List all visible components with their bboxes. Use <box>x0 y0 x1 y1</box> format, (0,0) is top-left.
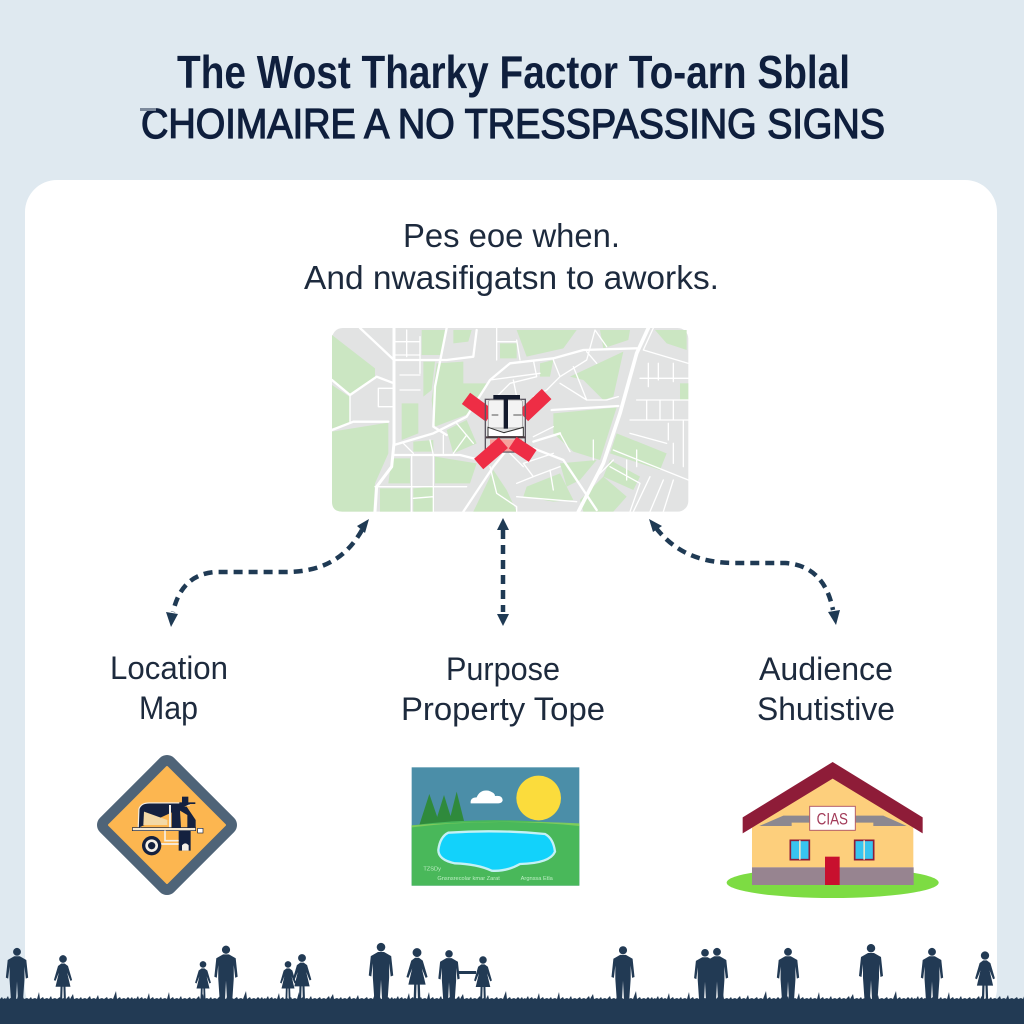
icon: landscape with pond: TZSDy <box>423 867 441 873</box>
icon: warning diamond with vehicle <box>107 765 227 885</box>
intro text <box>304 217 719 296</box>
ground with grass <box>0 986 1024 1024</box>
arrow: map to location <box>166 519 369 627</box>
arrow: map to purpose <box>497 518 509 626</box>
title <box>140 46 885 147</box>
label: location map: Location <box>110 650 228 686</box>
map with crossed-out sign <box>332 328 688 512</box>
label: purpose property type: Property Tope <box>401 691 605 727</box>
arrow: map to audience <box>649 519 840 625</box>
silhouettes: row of people <box>6 943 995 1000</box>
intro text: And nwasifigatsn to aworks. <box>304 259 719 296</box>
icon: sign post <box>485 395 525 452</box>
icon: house <box>727 762 939 898</box>
label: location map <box>110 650 228 726</box>
icon: landscape with pond: Argnssa Etla <box>521 876 554 882</box>
label: audience: Audience <box>759 651 893 687</box>
label: purpose property type <box>401 651 605 727</box>
panel: main card <box>25 180 997 1020</box>
label: audience <box>757 651 895 727</box>
icon: red cross lower arms <box>479 443 533 464</box>
label: audience: Shutistive <box>757 691 895 727</box>
title: CHOIMAIRE A NO TRESSPASSING SIGNS <box>141 100 885 147</box>
icon: landscape with pond <box>412 767 579 886</box>
label: purpose property type: Purpose <box>446 651 560 687</box>
icon: red cross upper arms <box>466 394 547 416</box>
icon: house: CIAS <box>817 810 848 829</box>
icon: landscape with pond: Gnsnsrecolar kmar Zarat <box>437 876 500 882</box>
label: location map: Map <box>139 690 198 726</box>
title: The Wost Tharky Factor To-arn Sblal <box>177 46 850 98</box>
intro text: Pes eoe when. <box>403 217 620 254</box>
